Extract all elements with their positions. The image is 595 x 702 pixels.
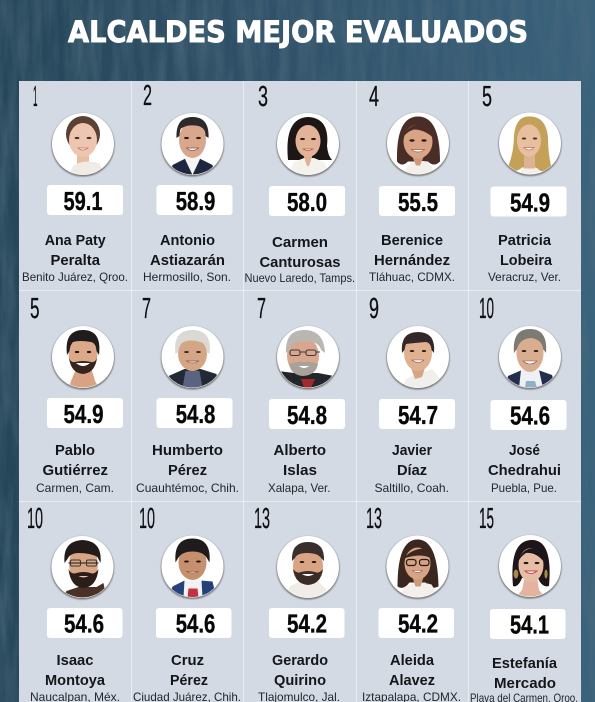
name: Aleida xyxy=(390,652,435,669)
score 58.0 xyxy=(269,186,345,217)
portrait: Berenice Hernández xyxy=(386,112,450,176)
portrait: Isaac Montoya xyxy=(51,536,114,600)
name xyxy=(45,232,106,269)
card: Humberto Pérez xyxy=(136,293,239,495)
name: Peralta xyxy=(50,252,101,269)
portrait: Ana Paty Peralta xyxy=(51,113,115,177)
card: Antonio Astiazarán xyxy=(143,80,232,284)
city: Puebla, Pue. xyxy=(491,481,557,495)
name: Patricia xyxy=(498,232,552,249)
score 54.8 xyxy=(269,399,345,430)
name xyxy=(389,652,435,689)
city: Nuevo Laredo, Tamps. xyxy=(244,271,355,285)
card: Gerardo Quirino: 13 xyxy=(254,503,270,535)
name: Lobeira xyxy=(500,252,553,269)
card: Alberto Islas xyxy=(257,293,345,495)
portrait: Aleida Alavez xyxy=(386,536,449,599)
name: Pérez xyxy=(168,462,207,479)
name xyxy=(492,655,558,692)
score 54.7 xyxy=(379,399,455,430)
name: Antonio xyxy=(160,232,215,249)
name: Mercado xyxy=(494,675,556,692)
portrait: Antonio Astiazarán xyxy=(161,113,224,177)
card: José Chedrahui: 10 xyxy=(479,293,494,325)
name: Alberto xyxy=(274,442,326,459)
name: Ana Paty xyxy=(45,232,106,249)
name xyxy=(488,442,561,479)
score 54.2 xyxy=(269,608,344,638)
name: Cruz xyxy=(171,652,204,669)
rank 4: 4 xyxy=(369,81,379,113)
portrait: Patricia Lobeira xyxy=(498,112,562,176)
name xyxy=(272,652,328,689)
city: Saltillo, Coah. xyxy=(374,481,449,495)
card: Berenice Hernández xyxy=(369,81,455,284)
card: Cruz Pérez xyxy=(133,503,241,702)
name xyxy=(274,442,326,479)
score 54.6: 54.6 xyxy=(510,400,550,430)
score 54.6 xyxy=(47,608,122,638)
name: Canturosas xyxy=(260,254,340,271)
score 54.9: 54.9 xyxy=(510,188,550,218)
portrait: Gerardo Quirino xyxy=(276,536,340,600)
portrait: Cruz Pérez xyxy=(161,536,224,599)
score 54.9 xyxy=(47,398,123,429)
score 58.0: 58.0 xyxy=(287,187,327,217)
rank 9: 9 xyxy=(369,293,379,325)
card: Gerardo Quirino xyxy=(254,503,344,702)
name xyxy=(42,442,108,479)
portrait: Pablo Gutiérrez xyxy=(51,326,115,390)
name: Hernández xyxy=(374,252,450,269)
card: Ana Paty Peralta: 1 xyxy=(33,81,38,113)
card: Carmen Canturosas xyxy=(244,81,355,285)
city: Cuauhtémoc, Chih. xyxy=(136,481,239,495)
city: Tláhuac, CDMX. xyxy=(369,270,455,284)
score 54.6 xyxy=(156,608,232,638)
name: Alavez xyxy=(389,672,435,689)
rank 3: 3 xyxy=(258,81,268,113)
score 54.8 xyxy=(156,398,232,429)
score 54.1: 54.1 xyxy=(510,610,549,640)
name xyxy=(260,234,340,271)
city: Hermosillo, Son. xyxy=(143,270,231,284)
score 54.9: 54.9 xyxy=(64,399,104,429)
name xyxy=(498,232,553,269)
name: Islas xyxy=(283,462,317,479)
name: Quirino xyxy=(274,672,326,689)
name: Pérez xyxy=(170,672,208,689)
name: Carmen xyxy=(272,234,328,251)
city: Benito Juárez, Qroo. xyxy=(22,270,128,284)
card: Estefanía Mercado: 15 xyxy=(479,503,494,535)
name xyxy=(45,652,106,689)
name xyxy=(392,442,432,479)
rank 5: 5 xyxy=(482,81,492,113)
rank 5: 5 xyxy=(30,293,40,325)
score 54.2: 54.2 xyxy=(287,608,327,638)
portrait: Alberto Islas xyxy=(276,326,340,390)
name xyxy=(374,232,450,269)
name: Estefanía xyxy=(492,655,558,672)
name: Isaac xyxy=(56,652,94,669)
name: Javier xyxy=(392,442,432,459)
card: José Chedrahui xyxy=(479,293,566,495)
score 54.2 xyxy=(378,608,454,638)
portrait: Carmen Canturosas xyxy=(276,113,340,177)
card: Estefanía Mercado xyxy=(470,503,578,702)
score 54.6: 54.6 xyxy=(176,608,215,638)
name: Berenice xyxy=(381,232,443,249)
name: Díaz xyxy=(397,462,427,479)
rank 2: 2 xyxy=(143,80,152,112)
name xyxy=(170,652,208,689)
card: Cruz Pérez: 10 xyxy=(139,503,155,535)
name: Humberto xyxy=(152,442,223,459)
name: Montoya xyxy=(45,672,106,689)
title: ALCALDES MEJOR EVALUADOS xyxy=(68,15,528,49)
score 55.5: 55.5 xyxy=(398,187,438,217)
rank 7: 7 xyxy=(142,293,151,325)
name xyxy=(152,442,223,479)
name: Astiazarán xyxy=(150,252,225,269)
rank 7: 7 xyxy=(257,293,266,325)
score 54.9 xyxy=(490,186,566,218)
portrait: Javier Díaz xyxy=(386,326,450,390)
card: Isaac Montoya xyxy=(27,503,122,702)
score 54.6 xyxy=(490,400,566,430)
card: Isaac Montoya: 10 xyxy=(27,503,43,535)
score 59.1: 59.1 xyxy=(64,186,102,216)
name: Pablo xyxy=(55,442,95,459)
card: Pablo Gutiérrez xyxy=(30,293,123,495)
score 59.1 xyxy=(47,185,123,216)
card: Patricia Lobeira xyxy=(482,81,566,284)
card: Ana Paty Peralta xyxy=(22,81,128,284)
portrait: Estefanía Mercado xyxy=(498,535,562,599)
score 55.5 xyxy=(379,186,455,217)
city: Carmen, Cam. xyxy=(36,481,114,495)
card: Javier Díaz xyxy=(369,293,455,495)
name: Gutiérrez xyxy=(42,462,108,479)
score 54.8: 54.8 xyxy=(176,399,215,429)
city: Veracruz, Ver. xyxy=(488,270,561,284)
score 58.9 xyxy=(156,185,232,216)
card: Aleida Alavez: 13 xyxy=(366,503,382,535)
score 54.8: 54.8 xyxy=(287,400,327,430)
score 54.2: 54.2 xyxy=(398,608,438,638)
score 54.6: 54.6 xyxy=(64,608,104,638)
portrait: Humberto Pérez xyxy=(161,326,224,390)
portrait: José Chedrahui xyxy=(498,326,562,390)
name: Chedrahui xyxy=(488,462,561,479)
score 58.9: 58.9 xyxy=(176,186,215,216)
name: Gerardo xyxy=(272,652,328,669)
score 54.1 xyxy=(490,609,566,640)
score 54.7: 54.7 xyxy=(398,400,438,430)
name: José xyxy=(509,442,540,459)
card: Aleida Alavez xyxy=(362,503,461,702)
name xyxy=(150,232,225,269)
city: Xalapa, Ver. xyxy=(268,481,330,495)
